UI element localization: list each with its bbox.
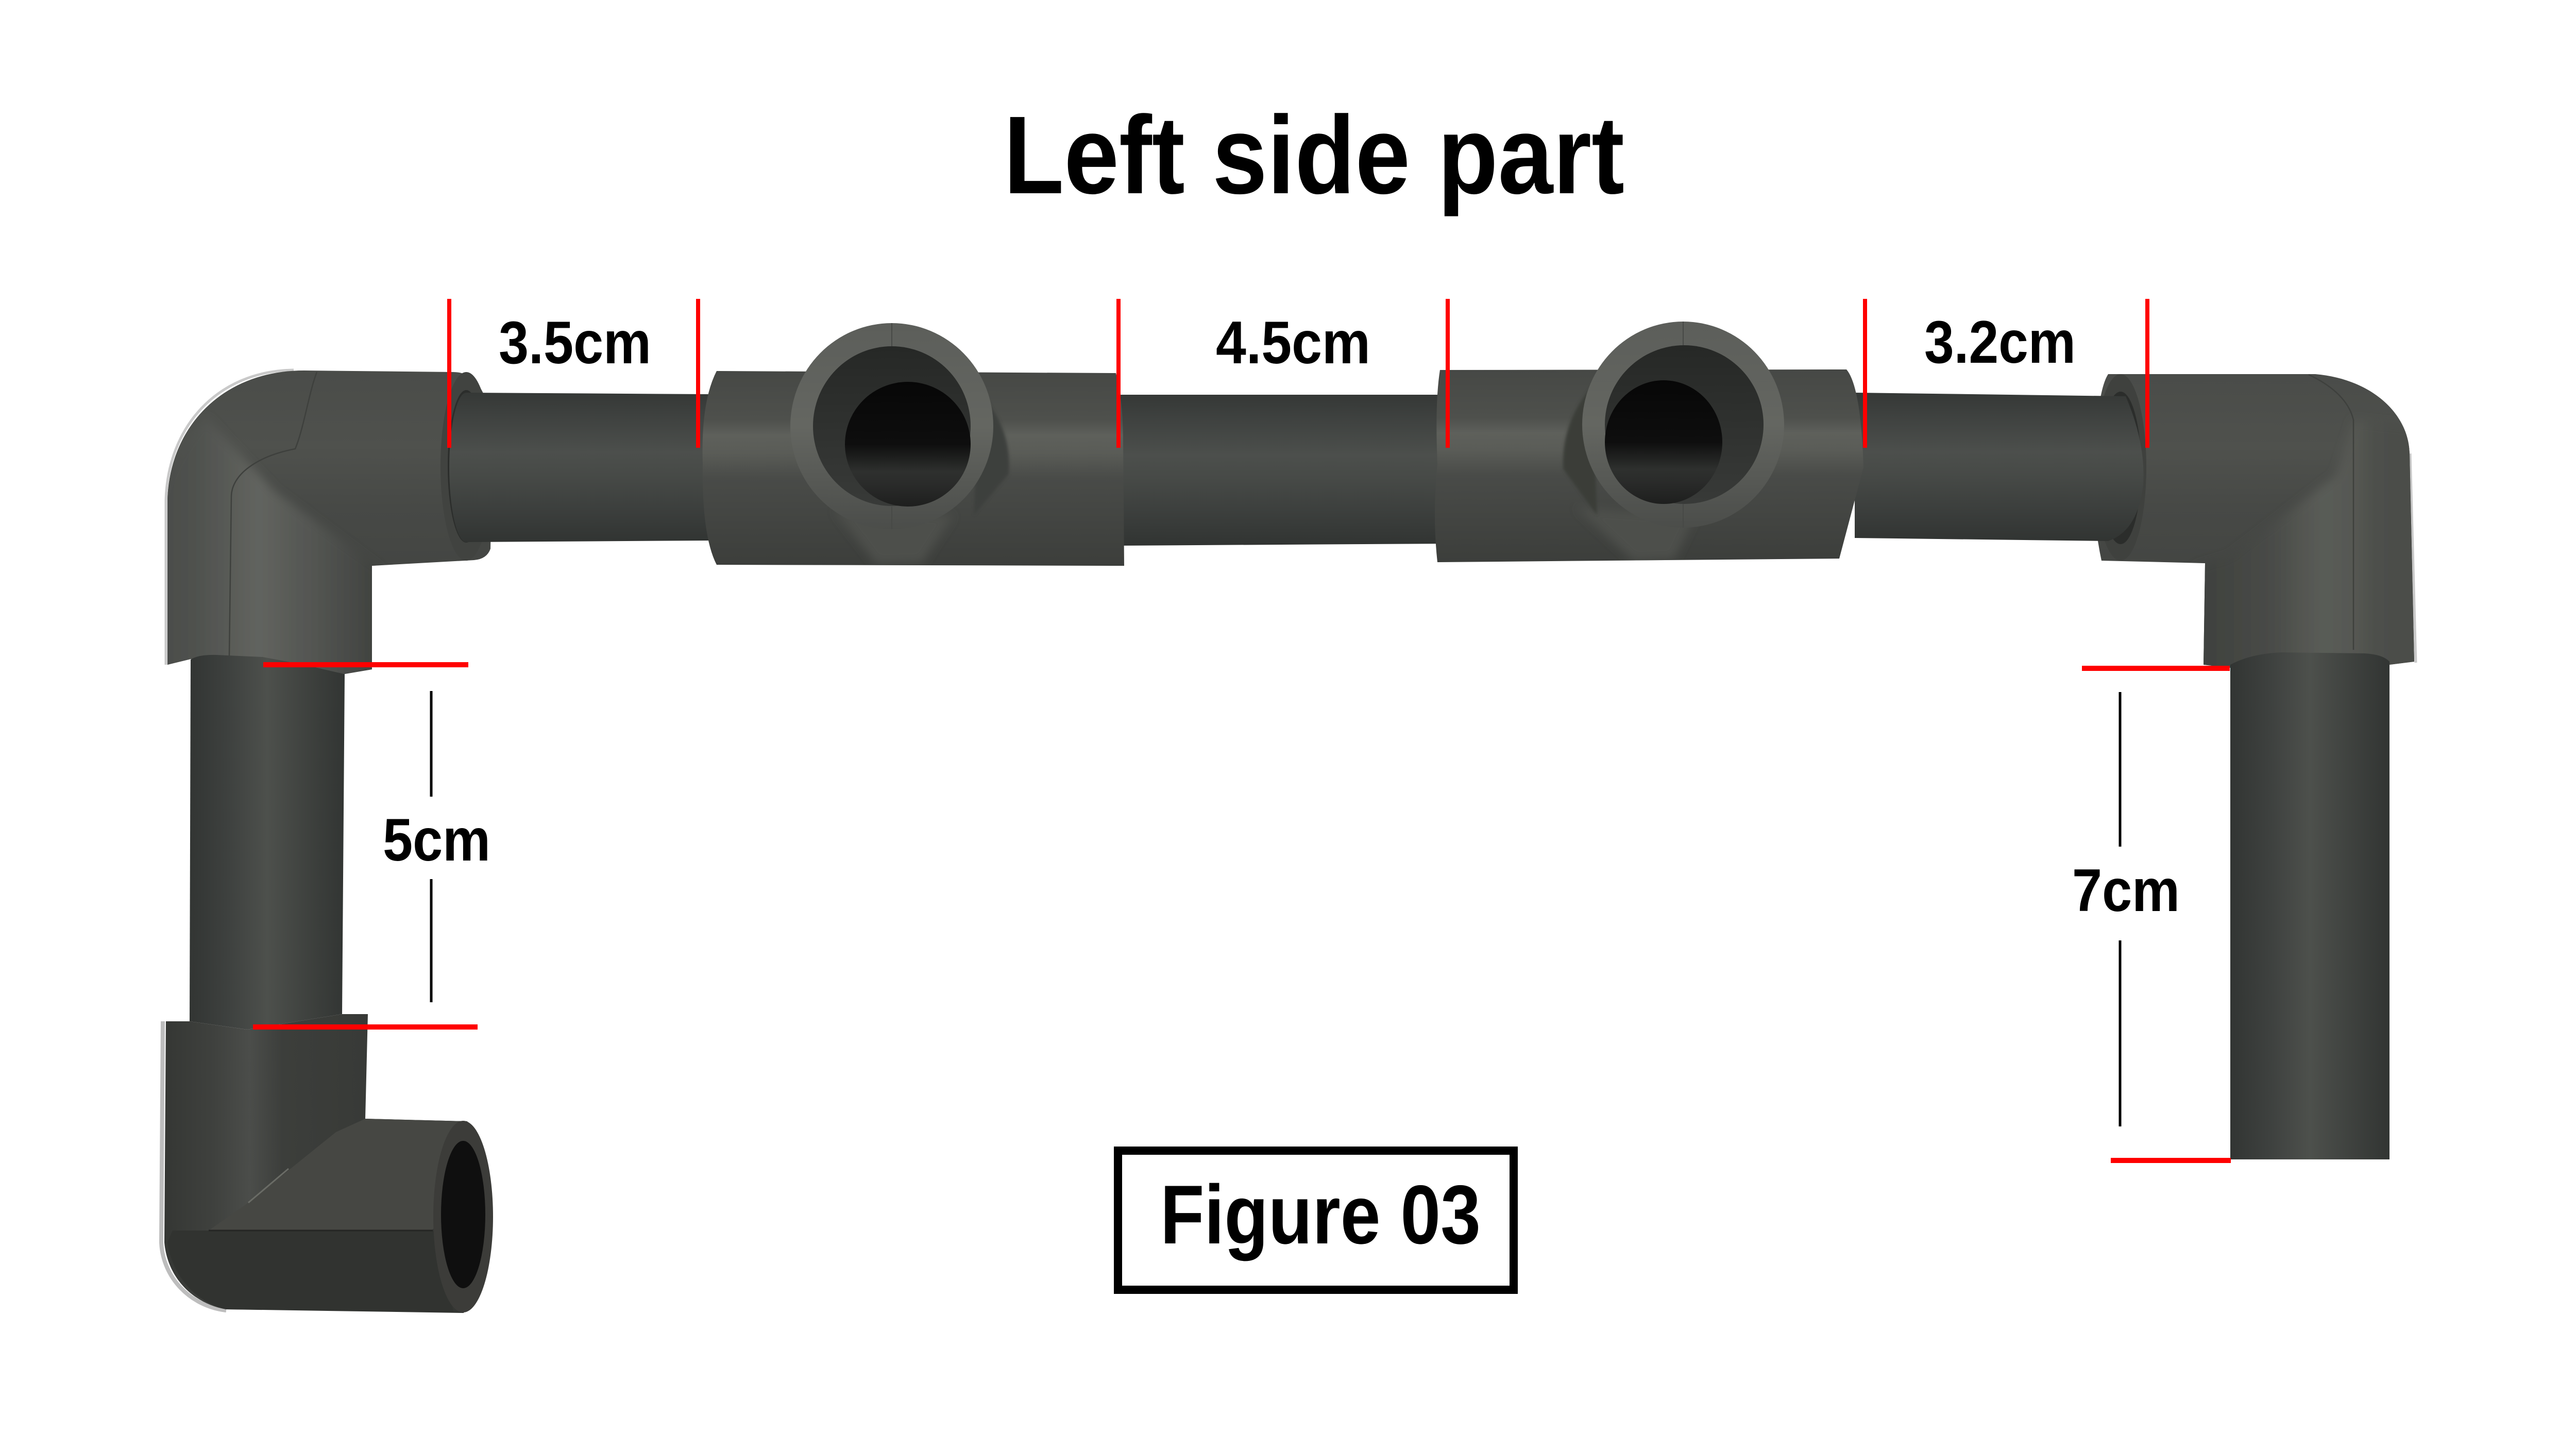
measurement: 4.5cm	[1116, 299, 1450, 448]
horizontal pipe: right	[1855, 393, 2144, 541]
right vertical pipe	[2230, 652, 2389, 1159]
horizontal pipe: middle	[1113, 395, 1448, 546]
figure label box: Figure 03	[1160, 1168, 1481, 1261]
horizontal pipe: left	[449, 393, 708, 542]
measurement: 3.2cm	[1863, 299, 2149, 448]
measurement: 3.5cm	[447, 299, 700, 448]
tee connector 2	[1435, 322, 1863, 562]
measurement: 7cm	[2072, 666, 2231, 1163]
tee connector 1	[703, 323, 1124, 566]
measurement: 4.5cm: 4.5cm	[1216, 309, 1370, 376]
left vertical pipe	[190, 655, 345, 1030]
right upper elbow	[2094, 374, 2427, 675]
tee 1 socket ring	[790, 323, 993, 529]
title: Left side part	[1004, 93, 1624, 217]
left upper elbow	[155, 370, 493, 680]
measurement: 5cm: 5cm	[383, 806, 490, 873]
pipe assembly photo	[155, 322, 2427, 1313]
tee 1 socket hole	[813, 346, 971, 506]
figure label box	[1118, 1151, 1514, 1290]
measurement: 5cm	[253, 662, 490, 1030]
tee 2 socket ring	[1582, 322, 1784, 528]
left lower elbow	[161, 1014, 493, 1313]
measurement: 3.5cm: 3.5cm	[499, 309, 651, 376]
tee 1 inner bore	[845, 382, 971, 507]
measurement: 3.2cm: 3.2cm	[1924, 308, 2076, 376]
measurement: 7cm: 7cm	[2072, 856, 2180, 924]
tee 2 socket hole	[1605, 345, 1764, 504]
tee 2 inner bore	[1605, 380, 1722, 504]
